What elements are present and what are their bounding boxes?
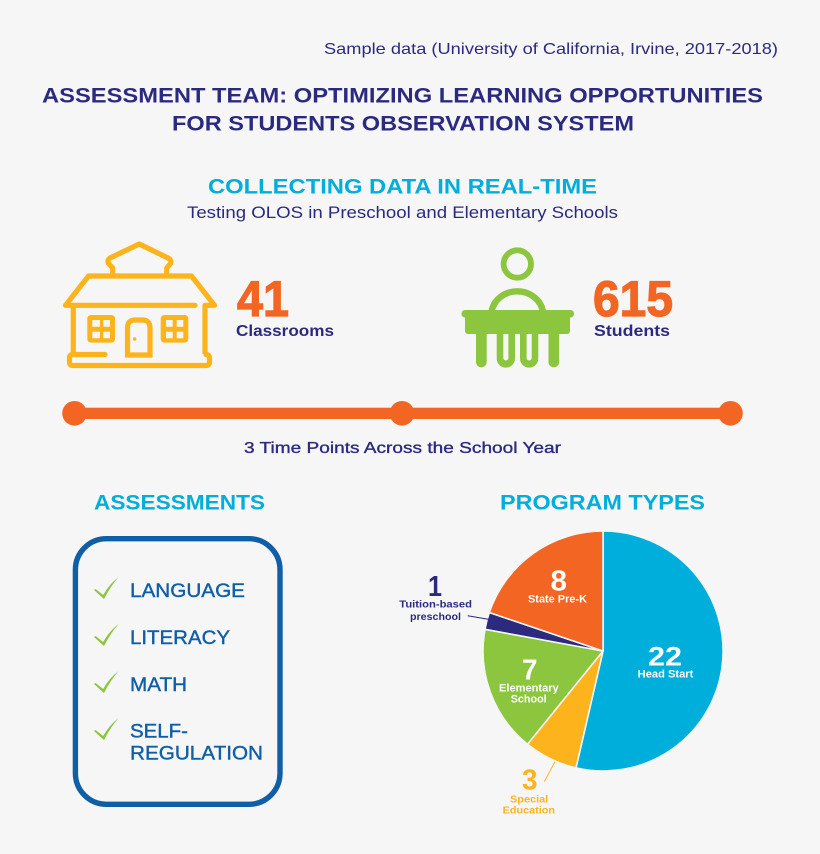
icon: schoolhouse [66, 244, 214, 366]
icon: schoolhouse right window [161, 315, 188, 343]
label: elementary school: School [511, 694, 547, 706]
label: special education: 3 [522, 764, 538, 796]
item: self-regulation [94, 718, 263, 764]
label: state pre-k: State Pre-K [528, 594, 587, 606]
label: special education: Special [510, 794, 548, 806]
icon: schoolhouse left window [87, 315, 115, 343]
label: special education: Education [503, 805, 555, 817]
label: state pre-k [528, 566, 587, 606]
slice: elementary school [483, 629, 603, 744]
title: ASSESSMENT TEAM: OPTIMIZING LEARNING OPPORTUNITIES [42, 84, 763, 108]
stat: students: Students [594, 323, 670, 340]
item: math [94, 671, 187, 696]
heading: assessments: ASSESSMENTS [94, 492, 265, 514]
icon: student at desk [462, 250, 574, 368]
item: self-regulation: SELF- [130, 720, 188, 742]
label: tuition-based preschool: 1 [428, 571, 442, 603]
item: literacy [94, 624, 230, 649]
label: tuition-based preschool [399, 571, 488, 623]
stat: classrooms [236, 271, 334, 340]
source note: Sample data (University of California, Irvine, 2017-2018) [324, 41, 778, 58]
item: language [94, 577, 245, 602]
label: head start [638, 642, 694, 681]
stat: students: 615 [593, 271, 673, 327]
slice: tuition-based preschool [485, 612, 603, 651]
label: elementary school [499, 654, 560, 706]
slice: state pre-k [489, 531, 603, 651]
stat: classrooms: Classrooms [236, 323, 334, 340]
timeline caption: 3 Time Points Across the School Year [244, 440, 562, 457]
label: tuition-based preschool: Tuition-based [399, 599, 472, 611]
timeline [62, 401, 743, 426]
label: elementary school: 7 [522, 654, 538, 686]
title [42, 84, 763, 136]
slice: head start [576, 531, 723, 771]
label: elementary school: Elementary [499, 683, 560, 695]
slice: special education [528, 651, 603, 768]
label: special education [503, 762, 555, 817]
item: language: LANGUAGE [130, 580, 245, 602]
item: math: MATH [130, 674, 187, 696]
pie chart: program types [483, 531, 723, 771]
title: FOR STUDENTS OBSERVATION SYSTEM [172, 112, 634, 136]
item: self-regulation: REGULATION [130, 742, 263, 764]
heading: program types: PROGRAM TYPES [500, 492, 705, 514]
section heading: collecting data: COLLECTING DATA IN REAL-TIME [208, 174, 597, 198]
label: head start: Head Start [638, 669, 694, 681]
item: literacy: LITERACY [130, 627, 230, 649]
stat: classrooms: 41 [237, 271, 289, 327]
label: head start: 22 [648, 642, 682, 672]
label: state pre-k: 8 [550, 566, 567, 598]
label: tuition-based preschool: preschool [410, 611, 461, 623]
section subheading: Testing OLOS in Preschool and Elementary Schools [187, 204, 618, 222]
panel: assessments list [75, 539, 280, 804]
